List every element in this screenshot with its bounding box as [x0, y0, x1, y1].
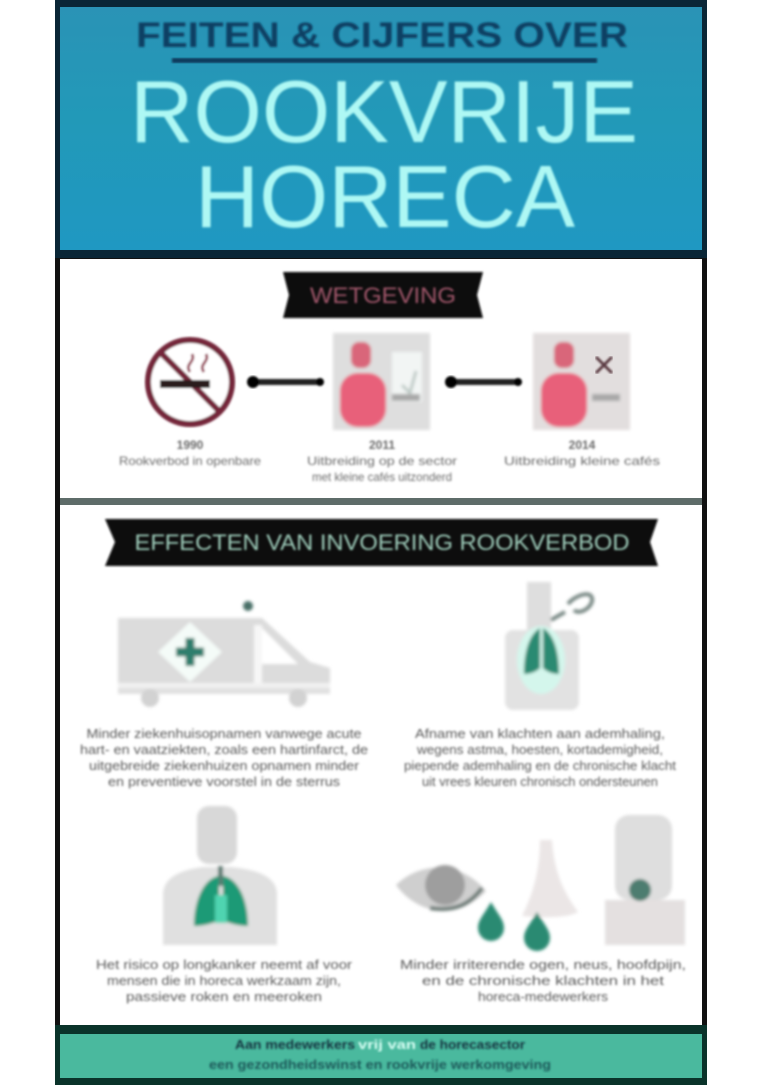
timeline label 3: Uitbreiding kleine cafés	[504, 454, 660, 468]
footer line 1: Aan medewerkers	[235, 1037, 355, 1052]
effect text 3: mensen die in horeca werkzaam zijn,	[107, 973, 341, 988]
timeline label 1	[119, 438, 261, 468]
nose	[522, 840, 578, 917]
footer line 1	[235, 1037, 525, 1052]
tear drop	[478, 902, 504, 941]
icon: ambulance	[118, 601, 330, 707]
arrow: 2 to 3	[445, 376, 522, 388]
banner: wetgeving	[283, 272, 483, 318]
icon: person with lungs	[163, 806, 277, 945]
effect text 4: horeca-medewerkers	[478, 989, 609, 1004]
effect text 4	[400, 957, 686, 1004]
effect text 1: en preventieve voorstel in de sterrus	[108, 774, 341, 789]
title: horeca: HORECA	[195, 147, 575, 246]
effect text 4: Minder irriterende ogen, neus, hoofdpijn,	[400, 957, 686, 972]
timeline label 1: Rookverbod in openbare	[119, 454, 261, 468]
heading: feiten en cijfers: FEITEN & CIJFERS OVER	[136, 16, 628, 55]
panel: effecten	[55, 505, 707, 1025]
effect text 1: Minder ziekenhuisopnamen vanwege acute	[86, 726, 362, 741]
timeline label 1: 1990	[177, 438, 204, 452]
icon: person indoors allowed	[333, 333, 430, 430]
effect text 2: Afname van klachten aan ademhaling,	[415, 726, 665, 741]
footer highlight word: vrij van	[358, 1037, 416, 1052]
effect text 1	[80, 726, 368, 789]
arrow: 1 to 2	[247, 376, 324, 388]
effect text 2: wegens astma, hoesten, kortademigheid,	[416, 742, 663, 757]
effect text 3: Het risico op longkanker neemt af voor	[96, 957, 353, 972]
panel: wetgeving	[55, 258, 707, 505]
timeline label 2: Uitbreiding op de sector	[307, 454, 457, 468]
effect text 3	[96, 957, 353, 1004]
banner: wetgeving: WETGEVING	[310, 283, 456, 308]
timeline label 2	[307, 438, 457, 484]
icon: person indoors forbidden	[533, 333, 630, 430]
icon: cross	[596, 357, 612, 373]
icon: smoker lungs	[505, 582, 592, 710]
timeline label 3	[504, 438, 660, 468]
title: rookvrije: ROOKVRIJE	[130, 62, 638, 161]
effect text 2: piepende ademhaling en de chronische klacht	[404, 758, 676, 773]
effect text 3: passieve roken en meeroken	[126, 989, 322, 1004]
effect text 2	[404, 726, 676, 789]
throat	[605, 815, 685, 945]
effect text 1: hart- en vaatziekten, zoals een hartinfarct, de	[80, 742, 368, 757]
footer line 1: de horecasector	[420, 1037, 525, 1052]
panel: footer	[55, 1025, 707, 1085]
eye	[396, 865, 486, 911]
banner: effecten	[105, 519, 658, 566]
footer line 2: een gezondheidswinst en rookvrije werkomgeving	[209, 1057, 551, 1072]
effect text 4: en de chronische klachten in het	[422, 973, 664, 988]
icon: no smoking	[148, 340, 232, 424]
title rule	[172, 58, 597, 63]
panel: header	[55, 0, 707, 258]
banner: effecten: EFFECTEN VAN INVOERING ROOKVERBOD	[134, 530, 630, 555]
timeline label 3: 2014	[569, 438, 596, 452]
nose drop	[524, 912, 550, 951]
effect text 1: uitgebreide ziekenhuizen opnamen minder	[89, 758, 360, 773]
icon: eye nose throat	[396, 815, 685, 951]
timeline label 2: met kleine cafés uitzonderd	[312, 470, 452, 484]
effect text 2: uit vrees kleuren chronisch ondersteunen	[422, 774, 658, 789]
timeline label 2: 2011	[369, 438, 395, 452]
